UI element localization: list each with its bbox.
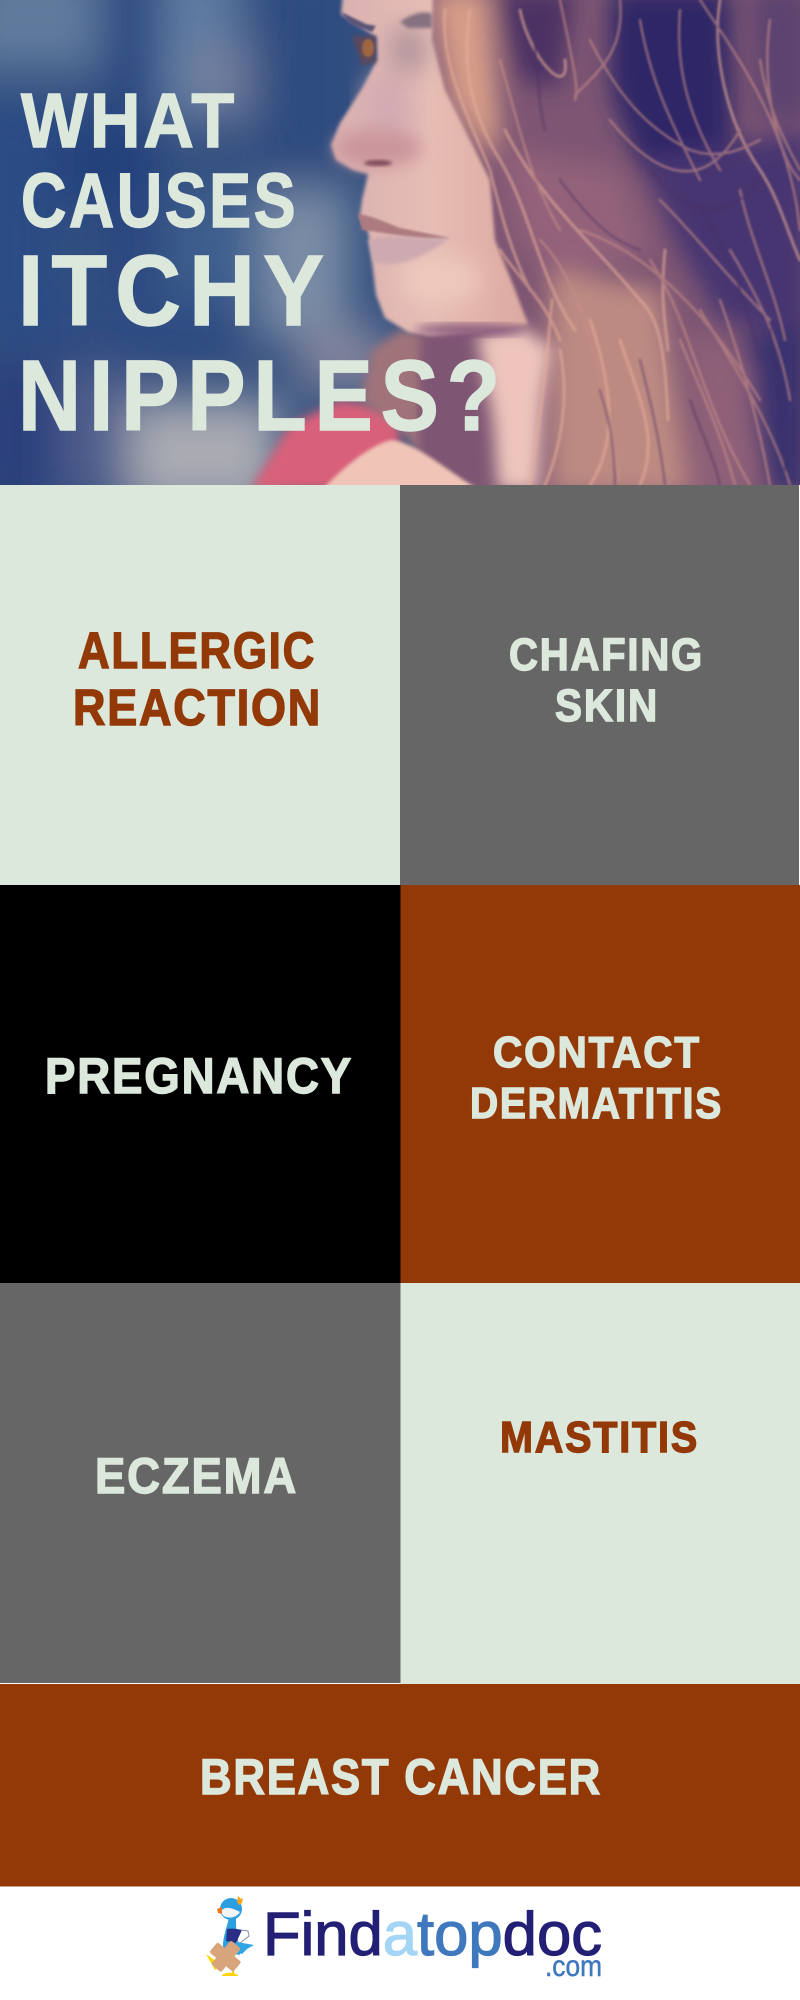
photo: neck [477, 325, 552, 490]
panel: eczema: ECZEMA [95, 1448, 298, 1504]
title: CAUSES [21, 158, 298, 244]
panel: chafing skin [400, 485, 799, 885]
icon: duck mascot with bandage [206, 1896, 254, 1976]
title: NIPPLES? [18, 340, 508, 452]
photo background: blurred blue bokeh [0, 0, 390, 510]
panel: eczema [0, 1283, 400, 1683]
panel: contact dermatitis: CONTACT [493, 1028, 701, 1077]
panel: chafing skin: CHAFING [509, 629, 704, 680]
wordmark: Findatopdoc [263, 1900, 602, 1968]
panel: mastitis: MASTITIS [500, 1413, 699, 1462]
photo: pink shirt [250, 400, 400, 490]
photo: face [331, 0, 528, 336]
panel: breast cancer [0, 1684, 800, 1886]
header photo: woman in profile [0, 0, 800, 510]
panel: chafing skin: SKIN [555, 680, 659, 731]
panel: allergic reaction: ALLERGIC [78, 622, 316, 679]
panel: contact dermatitis [400, 885, 800, 1283]
photo: hair strands [444, 0, 800, 485]
panel: allergic reaction [0, 485, 400, 885]
photo: hair mass [420, 0, 800, 500]
panel: contact dermatitis: DERMATITIS [470, 1079, 723, 1128]
photo: hand at chin [322, 440, 480, 490]
panel: allergic reaction: REACTION [73, 679, 322, 736]
title [18, 78, 508, 452]
wordmark suffix: .com [545, 1950, 602, 1983]
panel: mastitis [400, 1283, 800, 1684]
logo: Findatopdoc.com [206, 1896, 602, 1983]
photo: facial shading [334, 12, 525, 336]
photo: hair behind neck [357, 326, 427, 454]
panel: pregnancy [0, 885, 400, 1283]
panel: breast cancer: BREAST CANCER [200, 1749, 602, 1805]
title: WHAT [21, 78, 237, 164]
panel: pregnancy: PREGNANCY [45, 1048, 353, 1104]
title: ITCHY [18, 235, 332, 347]
